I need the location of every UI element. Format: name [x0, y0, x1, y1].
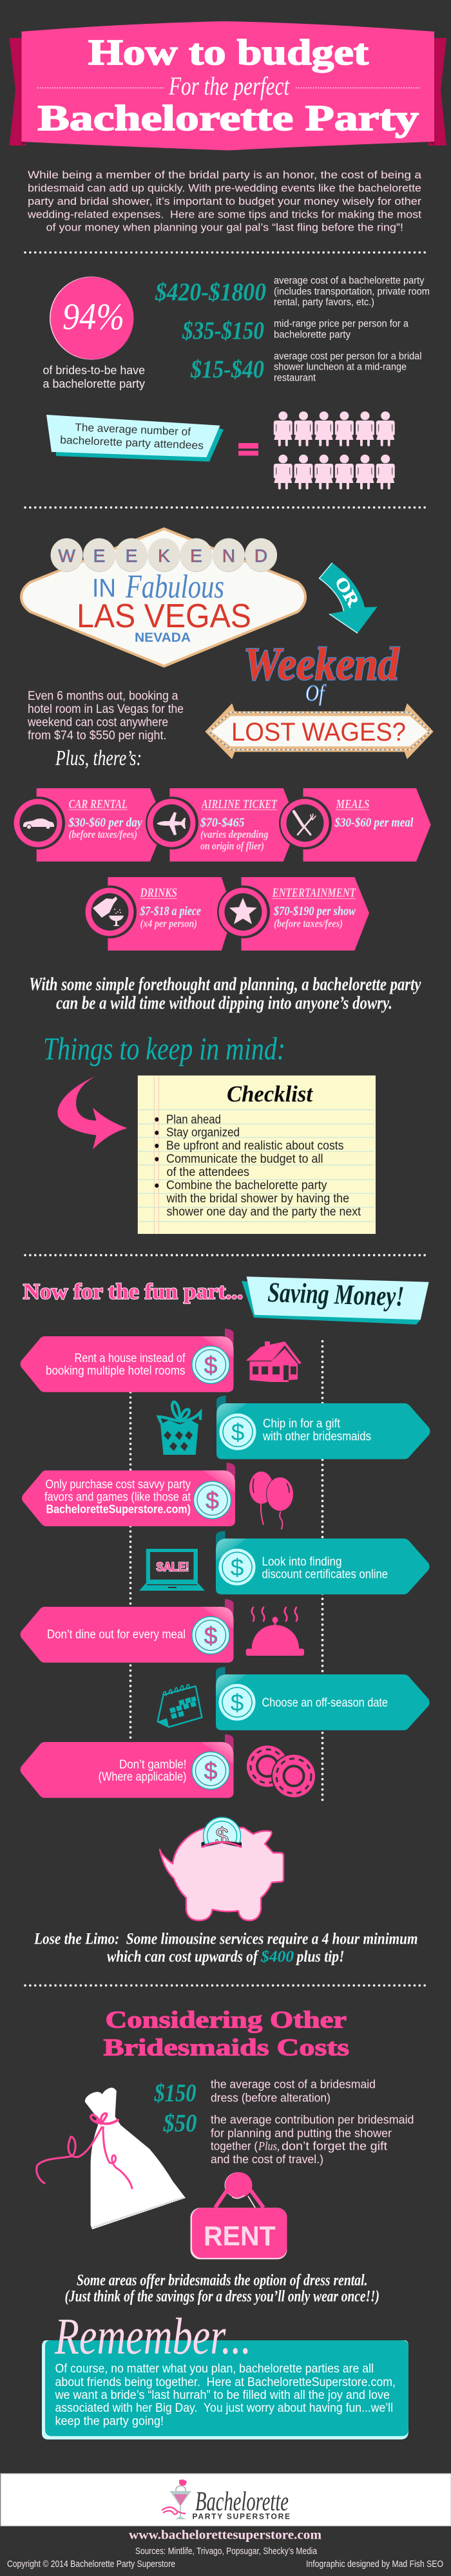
panel: remember [42, 2308, 408, 2439]
heading: Now for the fun part: Now for the fun part... [23, 1280, 243, 1304]
stat: 94 percent [43, 277, 146, 390]
tip: rent a house: Rent a house instead of [75, 1352, 186, 1365]
intro paragraph: bridesmaid can add up quickly. With pre-wedding events like the bachelorette [28, 182, 421, 194]
tip: don't dine out [21, 1599, 233, 1663]
hotel cost text: from $74 to $550 per night. [28, 729, 166, 743]
equals sign [238, 443, 258, 456]
remember heading: Remember... [54, 2308, 251, 2365]
sign: Lost Wages: LOST WAGES? [231, 718, 406, 746]
panel: car rental [12, 788, 165, 862]
icon: gift [158, 1402, 200, 1455]
bridesmaid cost stats: $150 [154, 2079, 196, 2107]
tip: chip in for a gift [216, 1396, 430, 1459]
icon: calendar [158, 1685, 202, 1727]
bridesmaid cost stats: for planning and putting the shower [211, 2126, 392, 2139]
limo tip text: which can cost upwards of [107, 1948, 259, 1965]
coin: $ [204, 1352, 217, 1378]
logo: martini glass [162, 2479, 191, 2519]
intro paragraph: of your money when planning your gal pal’s “last fling before the ring”! [46, 222, 403, 233]
heading: considering other bridesmaids costs [103, 2007, 349, 2061]
Las Vegas sign: W [58, 546, 75, 566]
limo tip text [34, 1930, 418, 1965]
footer logo band: PARTY SUPERSTORE [192, 2512, 290, 2521]
panel: airline ticket: AIRLINE TICKET [201, 797, 278, 811]
ribbon: Saving Money: Saving Money! [267, 1276, 405, 1312]
Las Vegas sign: K [158, 546, 170, 566]
tip: party favors: Only purchase cost savvy party [45, 1478, 191, 1492]
bridesmaid cost stats [154, 2078, 414, 2166]
footer logo band: Bachelorette [195, 2487, 289, 2517]
Las Vegas sign: NEVADA [135, 631, 191, 645]
coin [202, 1817, 241, 1844]
remember body text: Of course, no matter what you plan, bachelorette parties are all [55, 2362, 374, 2376]
icon: laptop sale [139, 1549, 205, 1591]
panel: meals [279, 788, 431, 862]
coin: $ [206, 1488, 219, 1513]
coin [192, 1752, 229, 1789]
checklist items: with the bridal shower by having the [166, 1192, 349, 1206]
heading: Weekend of: Weekend [244, 638, 399, 690]
coin [192, 1346, 229, 1383]
heading: Weekend of: Of [305, 680, 327, 706]
Las Vegas sign: N [222, 546, 235, 566]
tip: discount certificates [216, 1531, 429, 1595]
Las Vegas sign [21, 529, 305, 666]
coin: $ [204, 1623, 217, 1649]
cost stats list: rental, party favors, etc.) [274, 297, 374, 308]
checklist items: Stay organized [166, 1126, 240, 1140]
callout ribbon: average attendees: bachelorette party attendees [60, 434, 204, 451]
hotel cost text [27, 690, 184, 743]
icon: rent sign [191, 2172, 287, 2259]
tip: discount certificates: discount certificates online [262, 1568, 388, 1582]
title banner [9, 21, 446, 151]
heading: Things to keep in mind: Things to keep in mind: [43, 1030, 285, 1066]
checklist items: of the attendees [166, 1166, 249, 1179]
bridesmaid cost stats: dress (before alteration) [211, 2090, 331, 2104]
checklist items: Combine the bachelorette party [166, 1179, 327, 1193]
panel: car rental: (before taxes/fees) [68, 828, 137, 840]
copyright: Copyright © 2014 Bachelorette Party Superstore [7, 2559, 175, 2570]
heading: Plus, there's: Plus, there’s: [55, 746, 142, 770]
footer logo band [1, 2474, 451, 2526]
callout ribbon: average attendees: The average number of [75, 421, 191, 438]
checklist items: Be upfront and realistic about costs [166, 1139, 344, 1153]
tip: chip in for a gift: with other bridesmaids [262, 1430, 371, 1444]
icon: white dress with ribbon [37, 2088, 186, 2230]
checklist items [155, 1113, 361, 1219]
hotel cost text: weekend can cost anywhere [27, 716, 168, 730]
callout ribbon: average attendees [46, 415, 224, 462]
dress ribbon [37, 2114, 132, 2188]
title line: How to budget: How to budget [88, 33, 369, 73]
checklist items: Plan ahead [166, 1113, 221, 1126]
remember body text: keep the party going! [55, 2414, 164, 2429]
remember body text: associated with her Big Day. You just worry about having fun...we’ll [55, 2401, 393, 2415]
panel: drinks: $7-$18 a piece [140, 904, 201, 918]
ribbon: Saving Money [242, 1276, 429, 1325]
title line: Bachelorette Party: Bachelorette Party [37, 99, 419, 138]
stat: 94 percent: 94% [62, 296, 124, 337]
coin: $ [231, 1555, 244, 1580]
panel: drinks: (x4 per person) [140, 917, 197, 929]
icon: airplane [157, 812, 186, 835]
icon: knife and fork [294, 811, 316, 835]
limo tip text: plus tip! [296, 1948, 344, 1965]
arrow: OR [320, 563, 378, 633]
tip: don't dine out: Don’t dine out for every meal [47, 1628, 186, 1642]
panel: airline ticket [146, 788, 298, 862]
cost stats list: average cost of a bachelorette party [274, 276, 425, 287]
panel: meals: MEALS [336, 797, 370, 811]
tip: party favors: BacheloretteSuperstore.com) [46, 1502, 191, 1515]
sources: Sources: Mintlife, Trivago, Popsugar, Shecky’s Media [135, 2546, 318, 2557]
panel: airline ticket: $70-$465 [200, 815, 245, 829]
panel: entertainment: (before taxes/fees) [274, 917, 343, 929]
hotel cost text: hotel room in Las Vegas for the [28, 703, 184, 716]
bridesmaid cost stats: the average contribution per bridesmaid [211, 2113, 414, 2126]
panel: entertainment [217, 877, 369, 951]
cost stats list: $15-$40 [190, 355, 264, 383]
tip: rent a house: booking multiple hotel rooms [46, 1364, 186, 1378]
remember body text: about friends being together. Here at BacheloretteSuperstore.com, [55, 2375, 396, 2389]
tip: party favors: favors and games (like those at [44, 1491, 191, 1504]
Las Vegas sign: Fabulous [125, 569, 224, 605]
panel: drinks: DRINKS [140, 886, 177, 900]
checklist title: Checklist [227, 1081, 313, 1107]
Las Vegas sign: E [93, 546, 105, 566]
pictogram: twelve attendees [274, 412, 395, 489]
tip: discount certificates: Look into finding [262, 1555, 341, 1569]
panel: airline ticket: (varies depending [200, 828, 269, 840]
Las Vegas sign: E [190, 546, 202, 566]
cost stats list: $35-$150 [182, 317, 264, 345]
icon: rent sign: RENT [204, 2221, 276, 2252]
panel: airline ticket: on origin of flier) [200, 840, 264, 852]
remember body text: we want a bride’s “last hurrah” to be filled with all the joy and love [55, 2388, 390, 2402]
heading: considering other bridesmaids costs: Bridesmaids Costs [103, 2035, 349, 2061]
dress rental text [64, 2271, 379, 2305]
cost stats list: shower luncheon at a mid-range [274, 362, 407, 373]
bridesmaid cost stats: the average cost of a bridesmaid [211, 2078, 376, 2091]
cost stats list: mid-range price per person for a [274, 319, 408, 330]
cost stats list: bachelorette party [274, 329, 350, 340]
bridesmaid cost stats: $50 [163, 2109, 197, 2137]
tip: rent a house [21, 1329, 233, 1392]
title line: For the perfect: For the perfect [168, 71, 290, 100]
icon: dinner cloche [246, 1607, 304, 1656]
tip: don't gamble [21, 1734, 233, 1798]
tip: off-season date: Choose an off-season date [262, 1696, 388, 1710]
intro paragraph [27, 169, 422, 233]
cost stats list: restaurant [274, 373, 316, 384]
icon: piggy bank [160, 1817, 283, 1920]
intro paragraph: wedding-related expenses. Here are some tips and tricks for making the most [27, 209, 421, 220]
coin [192, 1616, 229, 1654]
bridesmaid cost stats: and the cost of travel.) [211, 2152, 323, 2166]
coin: $ [231, 1690, 244, 1716]
intro paragraph: party and bridal shower, it’s important to budget your money wisely for other [28, 195, 421, 207]
tip: off-season date [216, 1667, 429, 1730]
forethought statement [29, 974, 421, 1014]
stat: 94 percent: a bachelorette party [43, 377, 146, 390]
remember body text [55, 2362, 396, 2429]
panel: drinks [84, 877, 233, 951]
icon: casino chips [247, 1745, 316, 1799]
coin: $ [215, 1823, 229, 1850]
checklist items: shower one day and the party the next [166, 1206, 361, 1219]
bridesmaid cost stats: Plus, [258, 2141, 280, 2154]
icon: house [246, 1341, 302, 1382]
coin [219, 1414, 256, 1450]
icon: champagne [93, 896, 124, 926]
arrow: curved to checklist [57, 1075, 128, 1150]
panel: meals: $30-$60 per meal [334, 815, 414, 829]
stat: 94 percent: of brides-to-be have [43, 363, 145, 377]
icon: balloons [249, 1472, 294, 1530]
cost stats list: (includes transportation, private room [274, 286, 430, 297]
intro paragraph: While being a member of the bridal party is an honor, the cost of being a [28, 169, 422, 181]
checklist items: Communicate the budget to all [166, 1153, 323, 1166]
icon: car [23, 819, 54, 829]
tip: don't gamble: (Where applicable) [98, 1770, 187, 1784]
cost stats list [155, 276, 430, 384]
icon: star [229, 898, 257, 924]
coin: $ [231, 1419, 244, 1445]
cost stats list: $420-$1800 [155, 278, 266, 306]
arrow: OR: OR [331, 573, 363, 610]
coin [219, 1549, 255, 1586]
icon: laptop sale: SALE! [156, 1560, 189, 1574]
Las Vegas sign: E [126, 546, 137, 566]
panel: entertainment: $70-$190 per show [273, 904, 356, 918]
tip: chip in for a gift: Chip in for a gift [263, 1417, 341, 1431]
website url: www.bachelorettesuperstore.com [129, 2528, 321, 2543]
panel: car rental: $30-$60 per day [68, 815, 142, 829]
Las Vegas sign: D [254, 546, 267, 566]
coin [193, 1481, 231, 1519]
panel: checklist [138, 1075, 376, 1234]
dress rental text: Some areas offer bridesmaids the option of dress rental. [77, 2271, 367, 2289]
coin [219, 1684, 255, 1721]
coin: $ [204, 1758, 217, 1784]
Las Vegas sign: IN [92, 574, 116, 603]
hotel cost text: Even 6 months out, booking a [28, 690, 178, 703]
bridesmaid cost stats: together ( [211, 2139, 258, 2153]
Las Vegas sign: LAS VEGAS [77, 598, 251, 635]
panel: entertainment: ENTERTAINMENT [272, 886, 356, 900]
heading: considering other bridesmaids costs: Considering Other [106, 2007, 347, 2033]
cost stats list: average cost per person for a bridal [274, 351, 421, 362]
sign: Lost Wages [206, 704, 433, 759]
bridesmaid cost stats: don’t forget the gift [282, 2139, 387, 2153]
tip: don't gamble: Don’t gamble! [119, 1758, 187, 1772]
panel: car rental: CAR RENTAL [68, 797, 128, 811]
limo tip text: $400 [260, 1948, 294, 1965]
tip: party favors [22, 1463, 235, 1526]
